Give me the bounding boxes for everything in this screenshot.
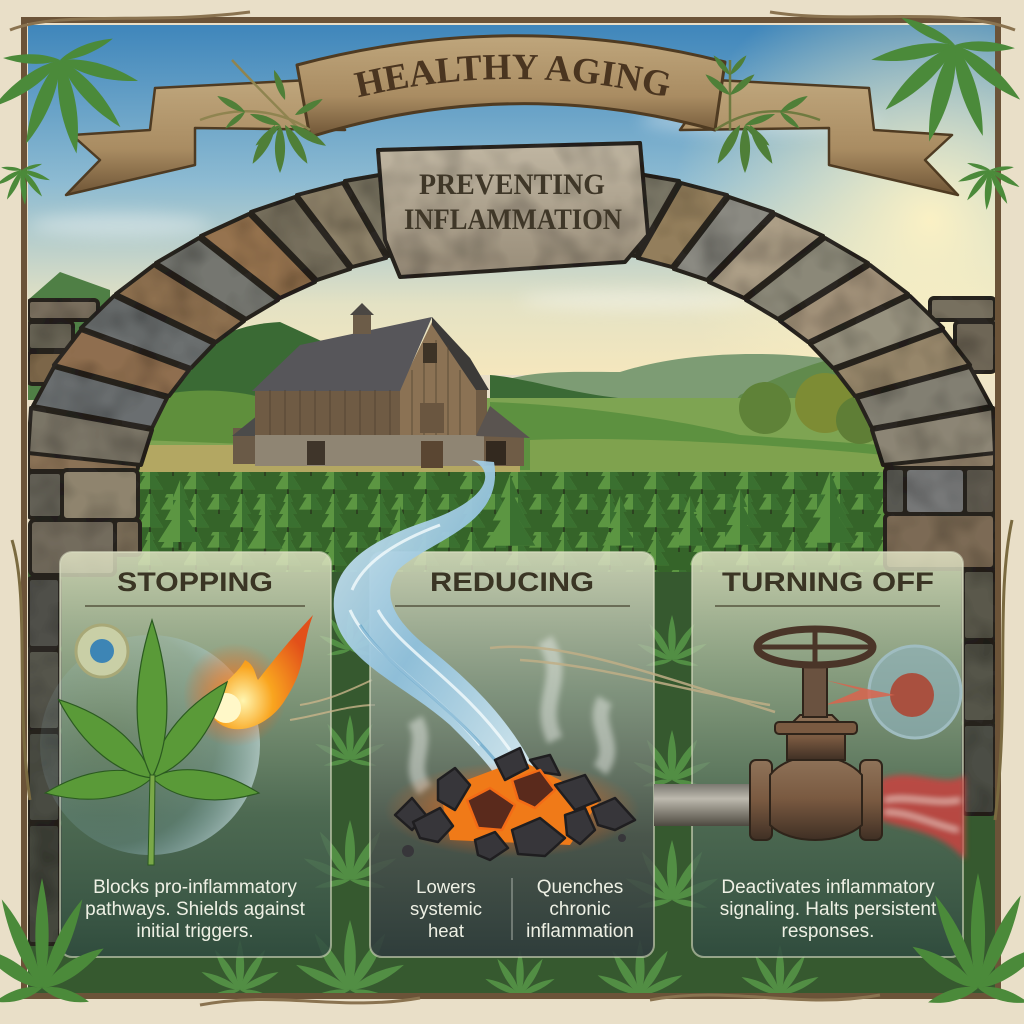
stopping heading: STOPPING [117, 567, 273, 597]
sky [28, 25, 995, 375]
stone masonry [28, 173, 995, 944]
left stone pillar [28, 300, 140, 944]
keystone text: PREVENTING [419, 168, 605, 201]
reducing text right: chronic [549, 899, 611, 920]
clouds [34, 116, 828, 312]
turning off heading: TURNING OFF [722, 567, 934, 597]
distant hills and trees [28, 272, 837, 400]
sun glow [694, 25, 995, 339]
reducing text right: inflammation [526, 921, 634, 942]
keystone text: INFLAMMATION [404, 203, 622, 236]
cannabis rows [138, 472, 888, 572]
leaf bottom right [910, 873, 1024, 1008]
keystone text [404, 174, 622, 230]
divider [512, 878, 513, 940]
reducing heading: REDUCING [430, 567, 594, 597]
barn [232, 303, 530, 468]
banner title: HEALTHY AGING [354, 54, 670, 98]
turning off text: Deactivates inflammatory [721, 877, 935, 898]
icon: valve [654, 629, 882, 840]
stopping text [85, 877, 306, 942]
panel: reducing [334, 460, 654, 957]
trees on the right [739, 373, 884, 444]
strands from flame [290, 680, 375, 720]
leaf top left [0, 31, 151, 167]
ribbon tails [66, 80, 958, 195]
stopping text: pathways. Shields against [85, 899, 306, 920]
reducing text left: Lowers [416, 876, 476, 897]
water stream [334, 460, 535, 775]
stopping text: initial triggers. [136, 921, 254, 942]
reducing text left: heat [428, 920, 464, 941]
foliage leaves between panels [200, 610, 820, 1005]
right stone pillar [885, 298, 995, 814]
rolling fields [138, 390, 884, 472]
reducing text left: systemic [410, 898, 482, 919]
banner herbs right [703, 54, 820, 173]
turning off text [720, 877, 937, 942]
icon: inflamed cell [825, 646, 961, 738]
icon: cell [76, 625, 128, 677]
leaf top right [852, 8, 1024, 162]
icon: glowing coals [384, 748, 640, 860]
reducing text right [527, 879, 633, 937]
banner: healthy aging [296, 34, 726, 136]
turning off text: responses. [782, 921, 874, 942]
panel: stopping [40, 552, 331, 957]
icon: cannabis leaf [43, 620, 261, 865]
leaf left edge [0, 162, 53, 207]
steam [415, 640, 607, 790]
wisps across valve [490, 647, 775, 712]
panel: turning off [490, 552, 965, 957]
leaf right edge [955, 160, 1022, 213]
icon: flame [183, 615, 313, 747]
keystone [378, 143, 648, 277]
leaf bottom left [0, 878, 106, 1007]
stone arch [28, 173, 995, 465]
stopping text: Blocks pro-inflammatory [93, 877, 297, 898]
reducing text right: Quenches [537, 877, 623, 898]
foliage field behind panels [28, 555, 995, 995]
reducing text left [410, 880, 482, 937]
banner herbs left [200, 60, 328, 173]
larger plants [158, 472, 855, 555]
red fluid spray [880, 775, 965, 860]
turning off text: signaling. Halts persistent [720, 899, 937, 920]
protective sphere [40, 635, 260, 855]
